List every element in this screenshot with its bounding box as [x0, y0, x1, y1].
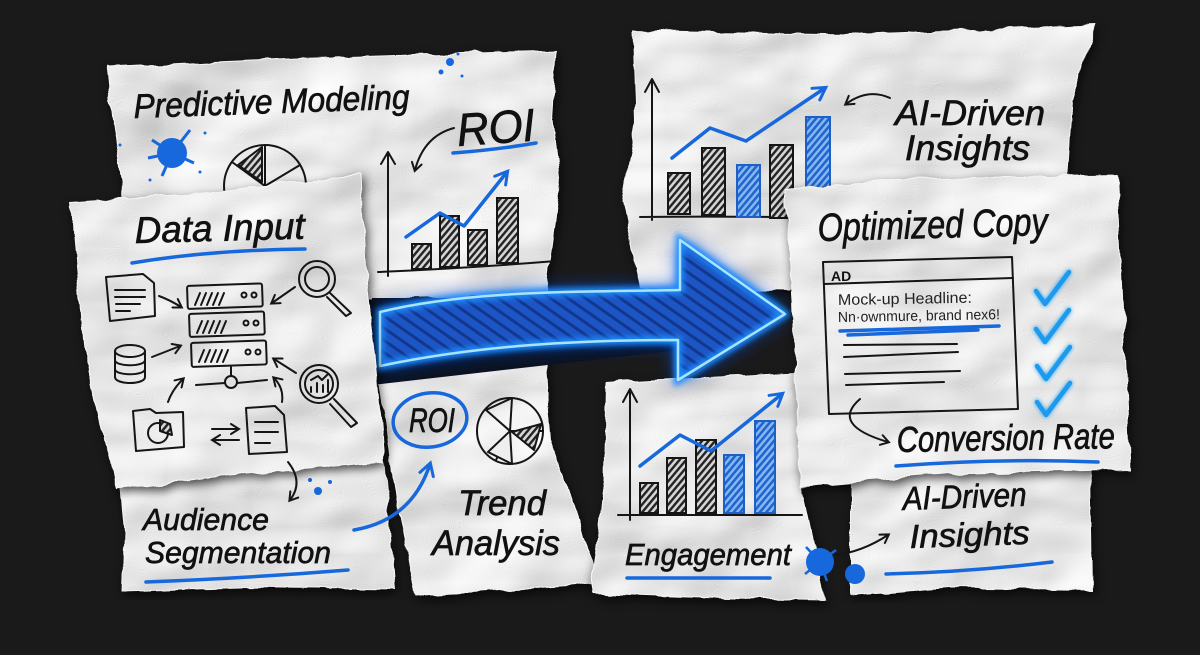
- ad mock-up: Nn·ownmure, brand nex6!: [838, 307, 1000, 326]
- heading: AI-Driven Insights: Insights: [909, 514, 1030, 555]
- panel: data input: [71, 174, 385, 500]
- heading: AI-Driven Insights: [900, 476, 1030, 555]
- arrow: [850, 399, 888, 442]
- callout: ROI circle: [390, 388, 470, 452]
- heading: Conversion Rate: Conversion Rate: [896, 415, 1115, 460]
- heading: Engagement: Engagement: [625, 537, 792, 572]
- panel: optimized copy: [785, 175, 1130, 487]
- icon: magnifier: [299, 261, 351, 316]
- ad mock-up: [823, 257, 1018, 414]
- bar chart: [378, 152, 556, 276]
- underline: [886, 562, 1052, 574]
- underline: [896, 461, 1098, 466]
- arrow: [415, 128, 454, 170]
- underline: [627, 576, 770, 580]
- icon: blue ink splash: [118, 130, 206, 182]
- panel: predictive modeling and ROI: [106, 50, 560, 300]
- heading: ROI: ROI: [455, 99, 537, 156]
- arrow: [846, 94, 890, 104]
- splatter: [308, 478, 332, 495]
- bar chart: [618, 389, 802, 520]
- bar chart: [640, 79, 838, 220]
- icon: document: [106, 274, 155, 321]
- heading: Predictive Modeling: Predictive Modeling: [133, 78, 410, 126]
- heading: Trend Analysis: Trend: [458, 484, 548, 523]
- panel: trend analysis: [354, 355, 600, 596]
- icon: folder with pie: [133, 409, 184, 451]
- callout: ROI circle: ROI: [409, 402, 455, 440]
- panel: audience segmentation: [118, 462, 396, 592]
- icon: pie chart: [224, 145, 306, 227]
- ad mock-up: Mock-up Headline:: [838, 290, 972, 309]
- panel: AI-driven insights top: [622, 25, 1095, 290]
- heading: Trend Analysis: [430, 484, 560, 563]
- arrows: [152, 287, 297, 500]
- icon: document: [246, 406, 287, 454]
- ad mock-up: AD: [831, 268, 851, 284]
- icon: magnifier with chart: [300, 365, 357, 427]
- heading: Audience Segmentation: [141, 502, 331, 570]
- heading: Trend Analysis: Analysis: [430, 524, 560, 563]
- heading: AI-Driven Insights: AI-Driven: [900, 476, 1027, 517]
- icon: ink splash and arrow: [805, 535, 888, 584]
- splatter: [438, 52, 464, 78]
- heading: Audience Segmentation: Audience: [141, 502, 269, 537]
- heading: Optimized Copy: Optimized Copy: [817, 201, 1050, 250]
- glow arrow: [372, 240, 785, 385]
- panel: AI-driven insights bottom: [850, 468, 1092, 596]
- panel: engagement: [590, 372, 826, 600]
- underline: [146, 570, 348, 582]
- heading: Audience Segmentation: Segmentation: [145, 535, 331, 570]
- blue arrow: [354, 464, 430, 530]
- underline: [453, 143, 536, 153]
- heading: AI-Driven Insights: Insights: [905, 129, 1030, 168]
- heading: AI-Driven Insights: AI-Driven: [893, 94, 1045, 133]
- icon: pie chart: [477, 398, 543, 464]
- icon: database: [115, 345, 145, 383]
- underline: [132, 249, 305, 263]
- icon: server rack: [187, 283, 267, 388]
- icon: check marks: [1036, 272, 1070, 415]
- heading: Data Input: Data Input: [134, 206, 307, 251]
- heading: AI-Driven Insights: [893, 94, 1045, 168]
